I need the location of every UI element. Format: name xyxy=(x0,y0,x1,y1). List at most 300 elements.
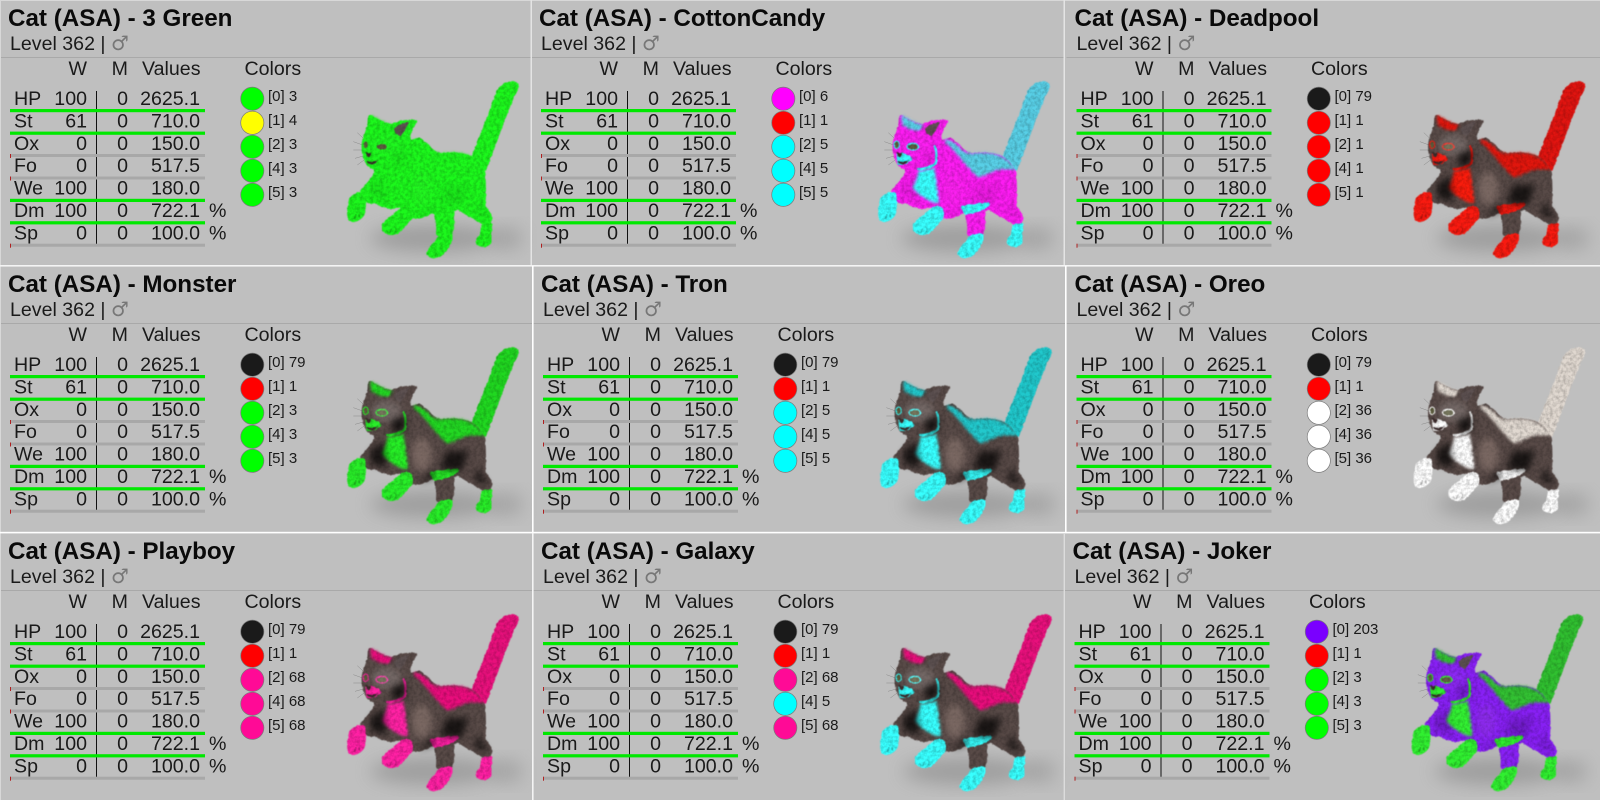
stats table: HP xyxy=(547,354,574,376)
stats table: 517.5 xyxy=(1215,688,1265,710)
stats table: 0 xyxy=(117,178,128,200)
table headers: Values xyxy=(142,58,201,80)
stats table: St xyxy=(14,110,33,132)
stats table: Sp xyxy=(547,488,571,510)
stats table: 0 xyxy=(117,354,128,376)
table headers: Values xyxy=(1207,591,1265,613)
stats table: Ox xyxy=(1078,666,1104,688)
stats table: 0 xyxy=(607,222,618,244)
stats table: 0 xyxy=(609,488,620,510)
table headers: Colors xyxy=(244,591,301,613)
stats table: 0 xyxy=(1184,354,1195,376)
stats table: 0 xyxy=(1184,88,1195,110)
stats table: 100.0 xyxy=(151,755,200,777)
stats table: 0 xyxy=(117,200,128,222)
stats table: 100 xyxy=(585,88,618,110)
color swatches: [5] 3 xyxy=(268,184,297,201)
header rule xyxy=(0,590,533,591)
stats table: Sp xyxy=(547,755,571,777)
level and gender: ♂ xyxy=(111,31,129,55)
stats table: 517.5 xyxy=(684,688,733,710)
stats table: 100 xyxy=(1121,178,1154,200)
color swatches xyxy=(241,620,306,739)
stats table: 2625.1 xyxy=(1207,354,1266,376)
level and gender: ♂ xyxy=(111,297,129,321)
table headers: W xyxy=(1135,58,1154,80)
title: Cat (ASA) - Monster xyxy=(8,271,237,298)
stats table: 0 xyxy=(76,222,87,244)
stats table: 61 xyxy=(65,643,87,665)
title: Cat (ASA) - Deadpool xyxy=(1074,5,1319,32)
stats table: 0 xyxy=(1143,133,1154,155)
stats table: 100 xyxy=(54,88,87,110)
stats table: 100.0 xyxy=(151,488,200,510)
stats table: We xyxy=(545,178,574,200)
title: Cat (ASA) - Playboy xyxy=(8,538,236,565)
stats table: 0 xyxy=(1184,399,1195,421)
stats table: 100 xyxy=(54,200,87,222)
table headers: Values xyxy=(675,324,734,346)
title: Cat (ASA) - Tron xyxy=(541,271,728,298)
stats table: 722.1 xyxy=(151,466,200,488)
stats table: HP xyxy=(1080,354,1108,376)
stats table: Dm xyxy=(547,733,577,755)
stats table xyxy=(1076,88,1293,248)
stats table: 517.5 xyxy=(1217,421,1267,443)
table headers: M xyxy=(645,324,661,346)
stats table: 61 xyxy=(1130,643,1152,665)
stats table: 0 xyxy=(1182,666,1193,688)
stats table: 0 xyxy=(117,643,128,665)
color swatches xyxy=(1305,620,1378,739)
stats table: HP xyxy=(1080,88,1108,110)
stats table: % xyxy=(1274,755,1291,777)
stats table: 0 xyxy=(1143,222,1154,244)
table headers: Colors xyxy=(244,324,301,346)
title: Cat (ASA) - Galaxy xyxy=(541,538,755,565)
stats table: 150.0 xyxy=(151,666,200,688)
cat illustration xyxy=(349,348,523,523)
stats table: 0 xyxy=(117,421,128,443)
stats table: 0 xyxy=(1143,155,1154,177)
stats table: 180.0 xyxy=(151,711,200,733)
stats table: 0 xyxy=(1141,688,1152,710)
stats table: 0 xyxy=(648,88,659,110)
stats table: 100 xyxy=(587,711,620,733)
stats table: 61 xyxy=(598,643,620,665)
stats table: We xyxy=(547,711,576,733)
stats table: % xyxy=(742,755,759,777)
stats table: 100 xyxy=(1121,466,1154,488)
stats table: 0 xyxy=(1184,466,1195,488)
color swatches: [2] 3 xyxy=(268,136,297,153)
header rule xyxy=(0,323,533,324)
stats table: Fo xyxy=(547,421,570,443)
stats table: We xyxy=(14,444,43,466)
stats table: Ox xyxy=(547,399,572,421)
color swatches xyxy=(1307,87,1372,206)
stats table: 0 xyxy=(1184,376,1195,398)
stats table: 0 xyxy=(117,688,128,710)
stats table: 710.0 xyxy=(684,376,733,398)
color swatches: [5] 3 xyxy=(268,450,297,467)
stats table: 0 xyxy=(1184,133,1195,155)
stats table: 0 xyxy=(76,488,87,510)
stats table: 0 xyxy=(609,688,620,710)
stats table: 517.5 xyxy=(151,421,200,443)
stats table: 0 xyxy=(1184,155,1195,177)
stats table: % xyxy=(1274,733,1291,755)
stats table: We xyxy=(14,178,43,200)
stats table: 150.0 xyxy=(682,133,731,155)
stats table xyxy=(541,88,757,248)
color swatches: [2] 5 xyxy=(801,402,830,419)
table headers xyxy=(1135,58,1368,80)
stats table: 0 xyxy=(1182,711,1193,733)
color swatches: [0] 6 xyxy=(799,88,828,105)
color swatches: [2] 3 xyxy=(1332,669,1362,686)
stats table: Dm xyxy=(547,466,577,488)
stats table: 61 xyxy=(1132,110,1154,132)
stats table: 0 xyxy=(650,399,661,421)
stats table: 2625.1 xyxy=(673,354,733,376)
table headers: Colors xyxy=(244,58,301,80)
stats table: 710.0 xyxy=(1215,643,1265,665)
stats table: 180.0 xyxy=(1217,178,1267,200)
stats table: 0 xyxy=(117,399,128,421)
stats table: 100 xyxy=(1119,621,1152,643)
stats table: Ox xyxy=(14,666,39,688)
stats table: We xyxy=(14,711,43,733)
color swatches: [2] 3 xyxy=(268,402,297,419)
table headers: M xyxy=(1176,591,1192,613)
table headers xyxy=(602,591,834,613)
stats table: 0 xyxy=(1143,421,1154,443)
stats table: 0 xyxy=(117,466,128,488)
color swatches: [0] 79 xyxy=(268,621,306,638)
stats table: 0 xyxy=(1182,621,1193,643)
stats table: Dm xyxy=(14,466,44,488)
stats table: 517.5 xyxy=(682,155,731,177)
table headers: W xyxy=(68,58,88,80)
color swatches xyxy=(241,87,297,206)
level and gender: ♂ xyxy=(111,564,129,588)
table headers: M xyxy=(645,591,661,613)
color swatches: [2] 5 xyxy=(799,136,828,153)
stats table: 100 xyxy=(587,354,620,376)
stats table: 0 xyxy=(117,133,128,155)
color swatches: [4] 5 xyxy=(801,693,830,710)
level and gender: ♂ xyxy=(644,564,662,588)
cat illustration xyxy=(1413,615,1588,790)
stats table: Fo xyxy=(547,688,570,710)
level and gender: Level 362 | xyxy=(543,299,639,321)
stats table: Ox xyxy=(1080,399,1106,421)
stats table: 100 xyxy=(585,200,618,222)
level and gender: Level 362 | xyxy=(543,566,639,588)
stats table: 0 xyxy=(648,110,659,132)
stats table: 150.0 xyxy=(1215,666,1265,688)
stats table xyxy=(543,354,759,514)
level and gender: ♂ xyxy=(642,31,660,55)
stats table: 100 xyxy=(54,711,87,733)
stats table: 0 xyxy=(650,666,661,688)
stats table: Dm xyxy=(14,200,44,222)
stats table: 100 xyxy=(54,621,87,643)
stats table: 100 xyxy=(587,621,620,643)
stats table: 180.0 xyxy=(151,178,200,200)
color swatches: [2] 1 xyxy=(1334,136,1364,153)
color swatches: [4] 1 xyxy=(1334,160,1364,177)
stats table: 0 xyxy=(1184,488,1195,510)
level and gender: Level 362 | xyxy=(10,566,106,588)
panel: Tron xyxy=(533,271,1066,523)
level and gender: Level 362 | xyxy=(1076,299,1172,321)
stats table: 100 xyxy=(54,733,87,755)
level and gender: ♂ xyxy=(644,297,662,321)
stats table: St xyxy=(547,376,566,398)
color swatches: [4] 5 xyxy=(799,160,828,177)
stats table: 180.0 xyxy=(1215,711,1265,733)
stats table: % xyxy=(209,222,226,244)
stats table: Sp xyxy=(14,222,38,244)
stats table: % xyxy=(1276,222,1293,244)
panel: Deadpool xyxy=(1066,5,1600,257)
color swatches xyxy=(1307,353,1372,472)
table headers: W xyxy=(600,58,618,80)
color swatches: [1] 1 xyxy=(268,645,297,662)
color swatches: [0] 3 xyxy=(268,88,297,105)
stats table: 0 xyxy=(117,666,128,688)
color swatches: [1] 1 xyxy=(1334,112,1364,129)
stats table: 100.0 xyxy=(684,755,733,777)
stats table: Fo xyxy=(14,688,37,710)
color swatches: [2] 68 xyxy=(268,669,306,686)
level and gender: ♂ xyxy=(1178,31,1195,55)
panel: Joker xyxy=(1064,538,1600,790)
stats table: Dm xyxy=(1080,200,1111,222)
color swatches: [1] 4 xyxy=(268,112,297,129)
stats table: 100.0 xyxy=(684,488,733,510)
stats table: % xyxy=(209,755,226,777)
color swatches xyxy=(774,353,839,472)
stats table: 0 xyxy=(76,399,87,421)
table headers: Colors xyxy=(1309,591,1366,613)
stats table: 710.0 xyxy=(151,110,200,132)
stats table: St xyxy=(1080,376,1100,398)
stats table: 0 xyxy=(648,178,659,200)
stats table: 61 xyxy=(65,110,87,132)
stats table: 0 xyxy=(609,666,620,688)
color swatches: [0] 79 xyxy=(1334,354,1372,371)
stats table: 61 xyxy=(596,110,618,132)
stats table: 0 xyxy=(1141,666,1152,688)
color swatches: [0] 79 xyxy=(801,354,839,371)
color swatches: [5] 68 xyxy=(268,717,306,734)
stats table: 517.5 xyxy=(151,155,200,177)
stats table: 0 xyxy=(650,466,661,488)
stats table: 150.0 xyxy=(151,133,200,155)
stats table: 0 xyxy=(1143,399,1154,421)
stats table: 2625.1 xyxy=(1207,88,1266,110)
stats table: 100 xyxy=(54,178,87,200)
table headers xyxy=(68,324,301,346)
stats table: We xyxy=(1080,178,1110,200)
color swatches: [1] 1 xyxy=(801,645,830,662)
stats table: 0 xyxy=(607,155,618,177)
stats table: Fo xyxy=(14,155,37,177)
table headers xyxy=(68,58,301,80)
table headers: M xyxy=(1178,324,1194,346)
panel: Monster xyxy=(0,271,533,523)
cat illustration xyxy=(1415,348,1590,523)
cat illustration xyxy=(349,615,523,790)
stats table: 0 xyxy=(117,711,128,733)
stats table: % xyxy=(742,733,759,755)
table headers: W xyxy=(602,591,620,613)
stats table: 0 xyxy=(117,444,128,466)
color swatches: [1] 1 xyxy=(268,378,297,395)
stats table: 0 xyxy=(117,755,128,777)
stats table: 100 xyxy=(587,466,620,488)
header rule xyxy=(531,57,1064,58)
stats table: 0 xyxy=(1143,488,1154,510)
stats table: 0 xyxy=(1184,222,1195,244)
color swatches: [4] 3 xyxy=(268,426,297,443)
level and gender: Level 362 | xyxy=(10,33,106,55)
stats table: 710.0 xyxy=(1217,110,1267,132)
stats table: 0 xyxy=(1184,200,1195,222)
color swatches xyxy=(772,87,828,206)
stats table: 100.0 xyxy=(151,222,200,244)
stats table: 0 xyxy=(1141,755,1152,777)
stats table: 150.0 xyxy=(1217,133,1267,155)
stats table: 2625.1 xyxy=(140,354,200,376)
stats table: 0 xyxy=(117,88,128,110)
table headers xyxy=(600,58,832,80)
stats table: 0 xyxy=(76,133,87,155)
level and gender: Level 362 | xyxy=(541,33,637,55)
stats table: % xyxy=(740,222,757,244)
header rule xyxy=(0,57,531,58)
stats table: 0 xyxy=(609,399,620,421)
stats table: 0 xyxy=(1182,688,1193,710)
stats table: 0 xyxy=(650,733,661,755)
table headers: Values xyxy=(1209,58,1267,80)
level and gender: ♂ xyxy=(1178,297,1195,321)
stats table: 2625.1 xyxy=(140,88,200,110)
table headers: W xyxy=(1135,324,1154,346)
stats table: We xyxy=(1078,711,1108,733)
stats table: HP xyxy=(14,621,41,643)
cat illustration xyxy=(882,348,1056,523)
table headers: W xyxy=(1133,591,1152,613)
stats table: 710.0 xyxy=(151,643,200,665)
stats table: Ox xyxy=(545,133,570,155)
stats table: St xyxy=(545,110,564,132)
color swatches: [0] 79 xyxy=(801,621,839,638)
level and gender: Level 362 | xyxy=(10,299,106,321)
header rule xyxy=(533,323,1066,324)
table headers: Values xyxy=(142,324,201,346)
level and gender: ♂ xyxy=(1176,564,1193,588)
table headers: W xyxy=(68,324,88,346)
stats table: Fo xyxy=(1080,421,1103,443)
stats table: 0 xyxy=(117,488,128,510)
stats table: 722.1 xyxy=(682,200,731,222)
stats table: 180.0 xyxy=(684,444,733,466)
stats table: 722.1 xyxy=(684,733,733,755)
table headers: M xyxy=(112,58,128,80)
table headers: Colors xyxy=(778,324,834,346)
color swatches: [5] 36 xyxy=(1334,450,1372,467)
stats table xyxy=(543,621,759,781)
stats table: 180.0 xyxy=(682,178,731,200)
stats table: 0 xyxy=(76,688,87,710)
stats table: 100.0 xyxy=(1215,755,1265,777)
stats table: 0 xyxy=(648,222,659,244)
stats table: Sp xyxy=(1078,755,1103,777)
stats table: 150.0 xyxy=(684,666,733,688)
stats table: 100 xyxy=(587,444,620,466)
cat illustration xyxy=(882,615,1056,790)
stats table: 100 xyxy=(54,466,87,488)
color swatches: [0] 203 xyxy=(1332,621,1378,638)
stats table: 0 xyxy=(76,755,87,777)
stats table xyxy=(1076,354,1293,514)
table headers: Values xyxy=(675,591,734,613)
color swatches: [2] 36 xyxy=(1334,402,1372,419)
stats table: 710.0 xyxy=(682,110,731,132)
stats table: % xyxy=(1276,488,1293,510)
color swatches: [4] 68 xyxy=(268,693,306,710)
stats table: Sp xyxy=(1080,488,1105,510)
stats table: 0 xyxy=(650,421,661,443)
stats table: Fo xyxy=(1080,155,1103,177)
stats table: 0 xyxy=(650,643,661,665)
stats table: 710.0 xyxy=(1217,376,1267,398)
panel: CottonCandy xyxy=(531,5,1064,257)
stats table: 100.0 xyxy=(682,222,731,244)
stats table: 61 xyxy=(65,376,87,398)
stats table: 150.0 xyxy=(151,399,200,421)
stats table: 100.0 xyxy=(1217,488,1267,510)
panel: Galaxy xyxy=(533,538,1064,790)
stats table: 61 xyxy=(598,376,620,398)
stats table: 100.0 xyxy=(1217,222,1267,244)
color swatches: [2] 68 xyxy=(801,669,839,686)
stats table: 0 xyxy=(76,421,87,443)
table headers: M xyxy=(643,58,659,80)
table headers: M xyxy=(112,324,128,346)
table headers: W xyxy=(602,324,620,346)
stats table: Ox xyxy=(14,399,39,421)
stats table: 100 xyxy=(1121,88,1154,110)
stats table: 722.1 xyxy=(1217,200,1266,222)
stats table: St xyxy=(14,643,33,665)
stats table: Sp xyxy=(14,755,38,777)
cat illustration xyxy=(880,82,1054,257)
stats table: 0 xyxy=(117,222,128,244)
stats table: 517.5 xyxy=(1217,155,1267,177)
stats table: Dm xyxy=(14,733,44,755)
stats table: 2625.1 xyxy=(673,621,733,643)
stats table: 0 xyxy=(609,421,620,443)
color swatches xyxy=(774,620,839,739)
stats table: 0 xyxy=(1182,733,1193,755)
color swatches: [5] 3 xyxy=(1332,717,1362,734)
stats table xyxy=(10,621,226,781)
